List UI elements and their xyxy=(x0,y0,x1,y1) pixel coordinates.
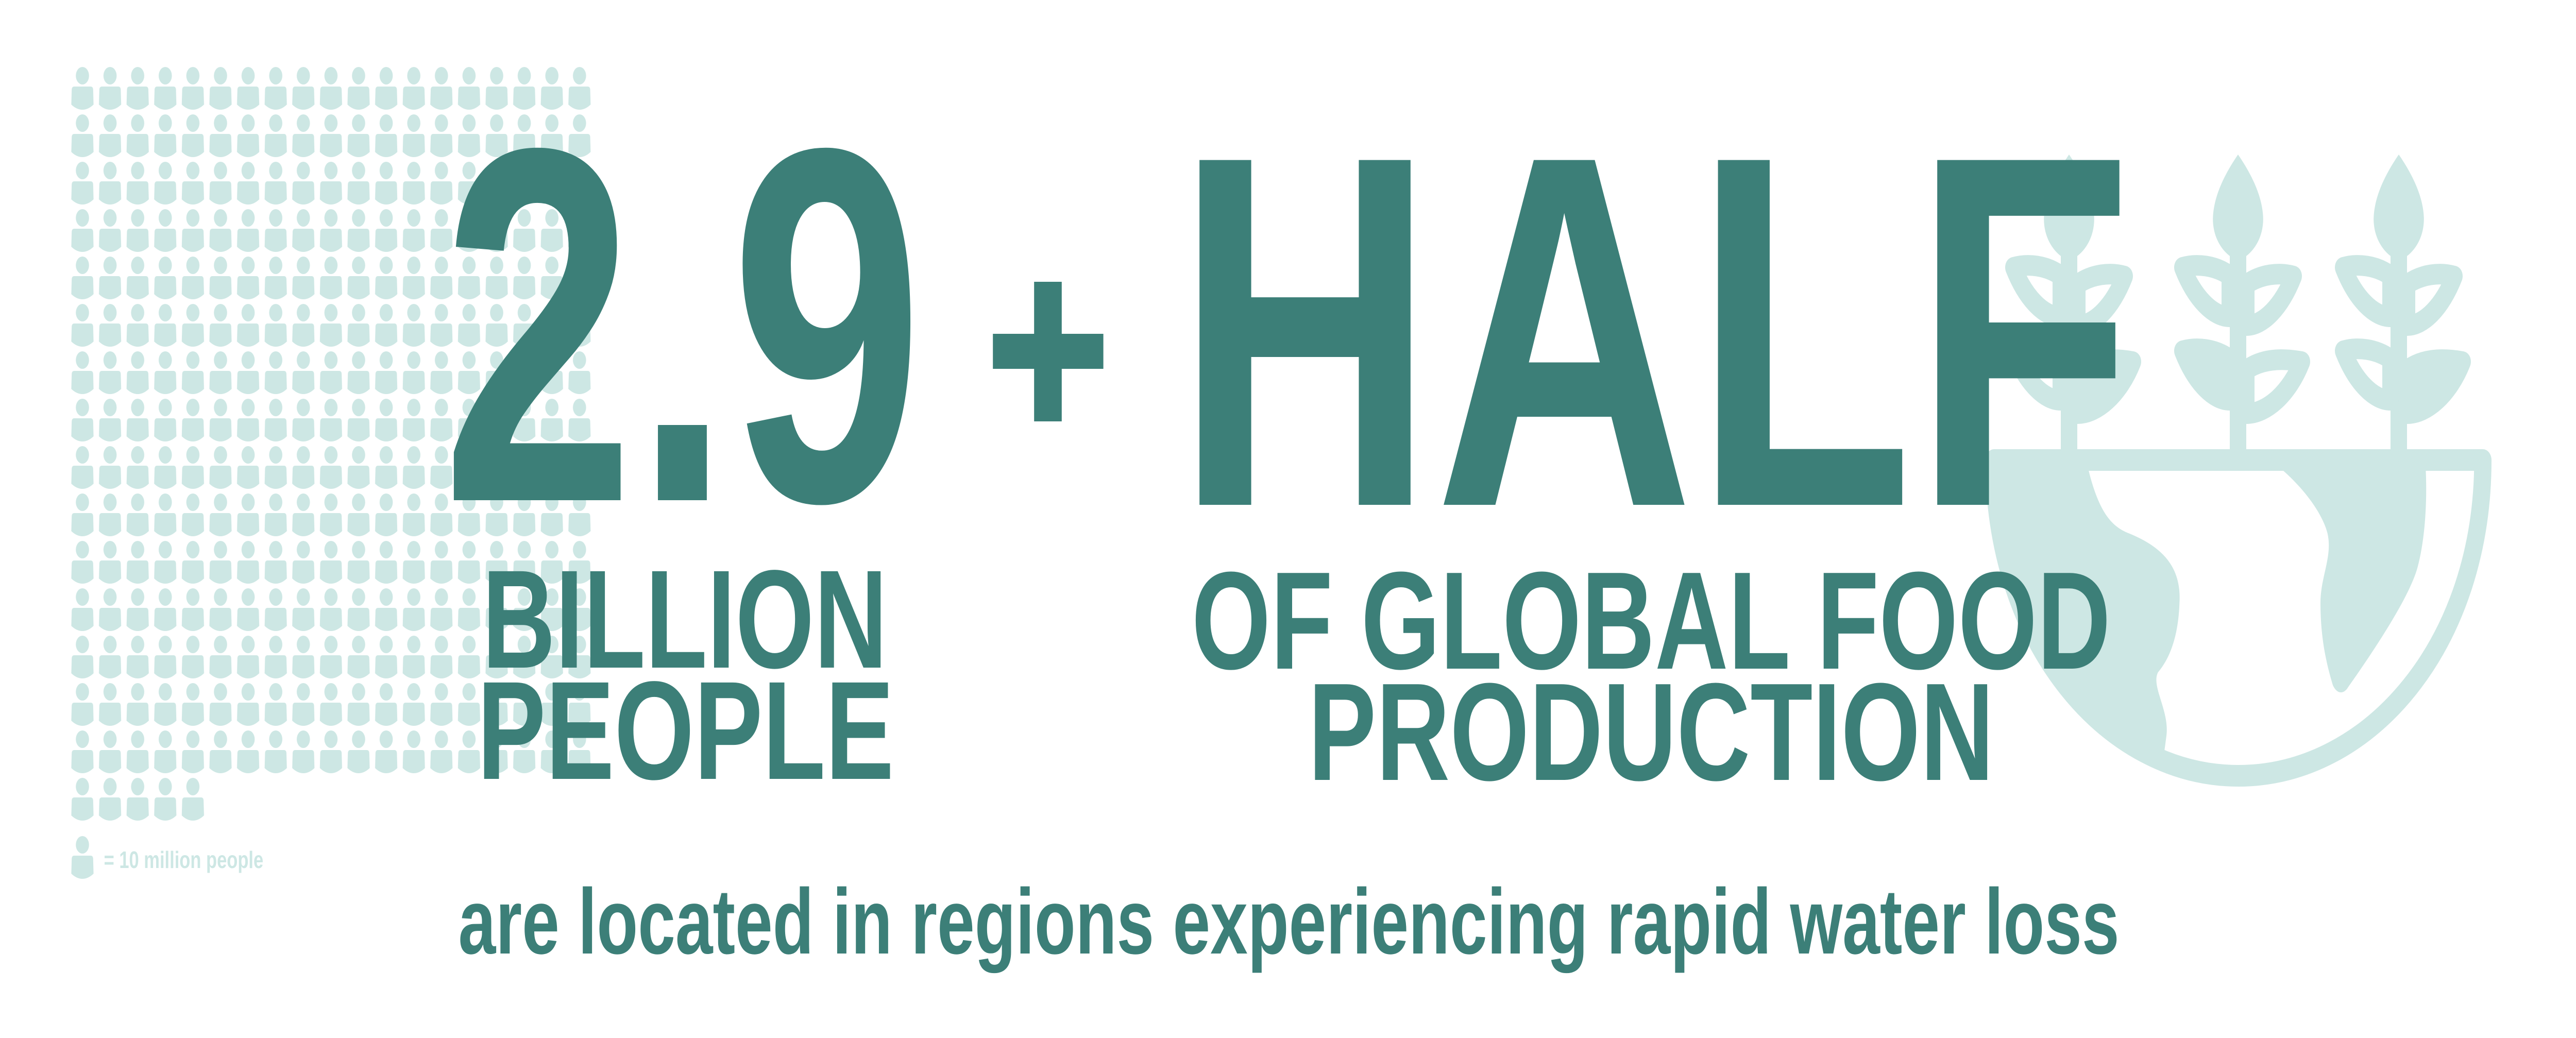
text: BILLION PEOPLE xyxy=(477,541,894,809)
text: OF GLOBAL FOOD PRODUCTION xyxy=(1192,543,2111,809)
bottom statement: are located in regions experiencing rapid water loss xyxy=(459,870,2120,974)
legend text: = 10 million people xyxy=(104,846,263,873)
globe bowl outline xyxy=(1994,460,2483,776)
text: OF GLOBAL FOOD PRODUCTION: PRODUCTION xyxy=(1308,654,1994,809)
globe land: left continent xyxy=(1994,466,2180,768)
big number: 2.9: 2.9 xyxy=(442,44,923,608)
plant leaves xyxy=(2013,265,2463,414)
icon: globe bowl with plants xyxy=(1994,155,2483,776)
people grid: 290 icons xyxy=(69,67,594,825)
plus sign xyxy=(993,282,1104,421)
plant buds xyxy=(2044,155,2424,256)
text: BILLION PEOPLE: BILLION xyxy=(482,541,887,698)
big word: HALF: HALF xyxy=(1176,51,2132,611)
text: BILLION PEOPLE: PEOPLE xyxy=(477,653,894,809)
icon: person xyxy=(71,836,94,879)
text: OF GLOBAL FOOD PRODUCTION: OF GLOBAL FOOD xyxy=(1192,543,2111,698)
legend: 1 icon = 10 million people xyxy=(71,836,263,879)
plant stems xyxy=(2061,247,2407,453)
globe land: right continent xyxy=(2278,466,2426,692)
